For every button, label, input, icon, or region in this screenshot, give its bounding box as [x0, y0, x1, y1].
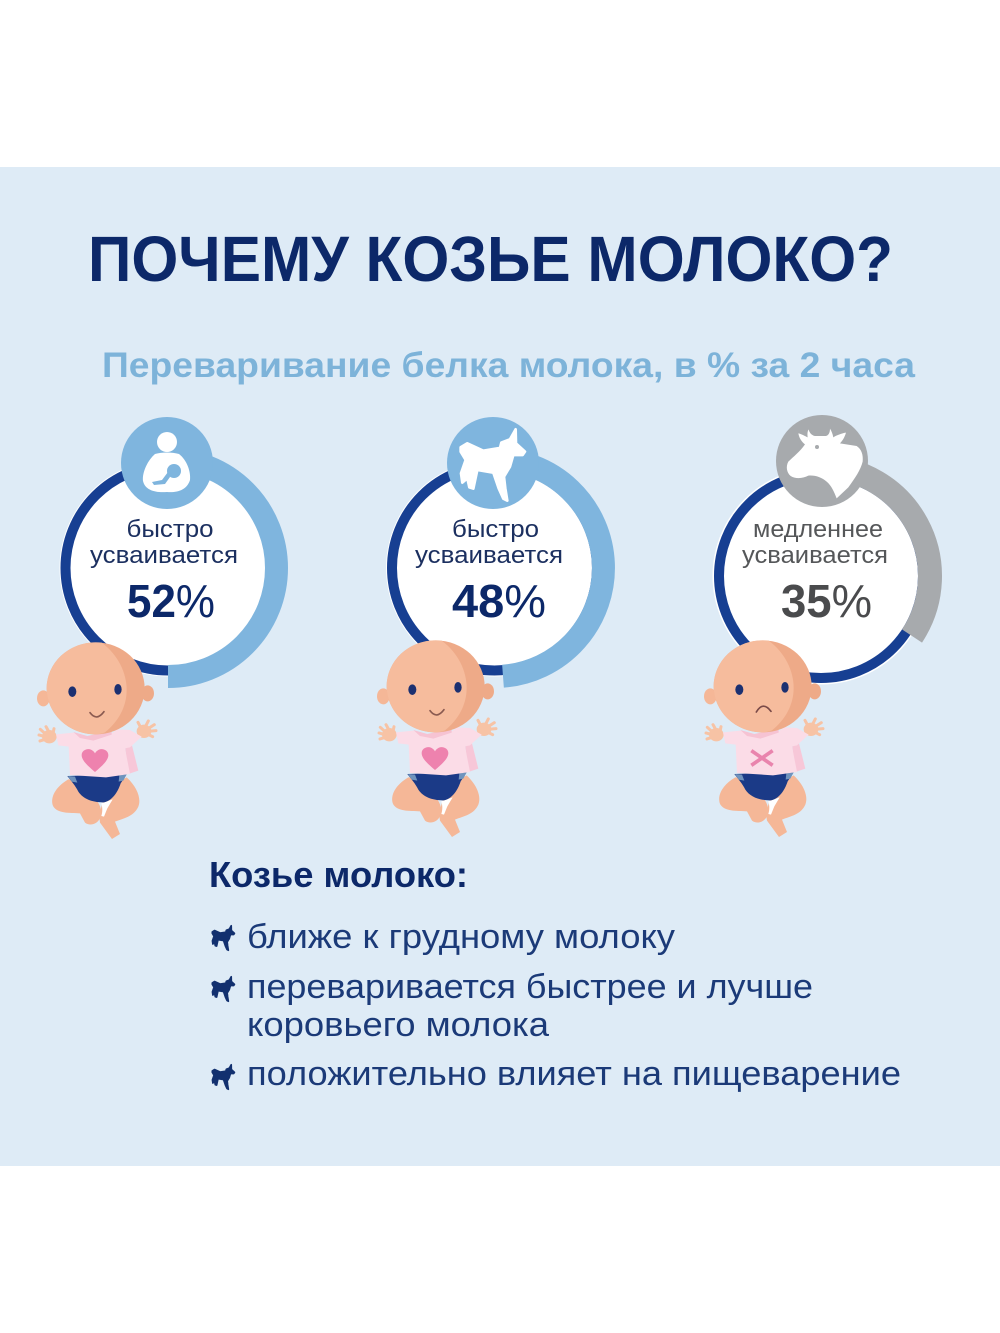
- label: fast digestion: быстро: [452, 516, 539, 543]
- panel: goat milk: [377, 417, 603, 837]
- panel: breast milk: [37, 417, 276, 839]
- baby: happy with heart: [377, 640, 496, 837]
- baby: happy with heart: [37, 642, 156, 839]
- bullet: goat: [212, 977, 234, 1001]
- label: digested: усваивается: [415, 542, 563, 569]
- value: 35%: 35%: [781, 575, 872, 627]
- icon: cow: [776, 415, 868, 507]
- background band: [0, 167, 1000, 1166]
- ring: breast milk 52%: [60, 460, 276, 676]
- list item 2: переваривается быстрее и лучше: [247, 968, 813, 1006]
- title: ПОЧЕМУ КОЗЬЕ МОЛОКО?: [88, 223, 893, 295]
- label: fast digestion: быстро: [126, 516, 214, 543]
- heading: Козье молоко:: [209, 854, 468, 895]
- label: digested: усваивается: [90, 542, 238, 569]
- list item 1: ближе к грудному молоку: [247, 918, 675, 956]
- label: slower: медленнее: [753, 516, 883, 543]
- bullet: goat: [212, 1065, 234, 1089]
- list item 3: положительно влияет на пищеварение: [247, 1055, 901, 1093]
- panel: cow milk: [704, 415, 930, 837]
- ring: goat milk 48%: [386, 459, 603, 676]
- ring: cow milk 35%: [712, 467, 930, 684]
- label: digested: усваивается: [742, 542, 888, 569]
- icon: mother and child: [121, 417, 213, 509]
- value: 52%: 52%: [127, 575, 215, 627]
- bullet: goat: [212, 926, 234, 950]
- icon: goat: [447, 417, 539, 509]
- value: 48%: 48%: [452, 575, 546, 627]
- subtitle: Переваривание белка молока, в % за 2 часа: [102, 346, 916, 385]
- baby: sad with cross: [704, 640, 823, 837]
- list item 2 continued: коровьего молока: [247, 1006, 549, 1044]
- panel: goat milk benefits: [209, 854, 901, 1093]
